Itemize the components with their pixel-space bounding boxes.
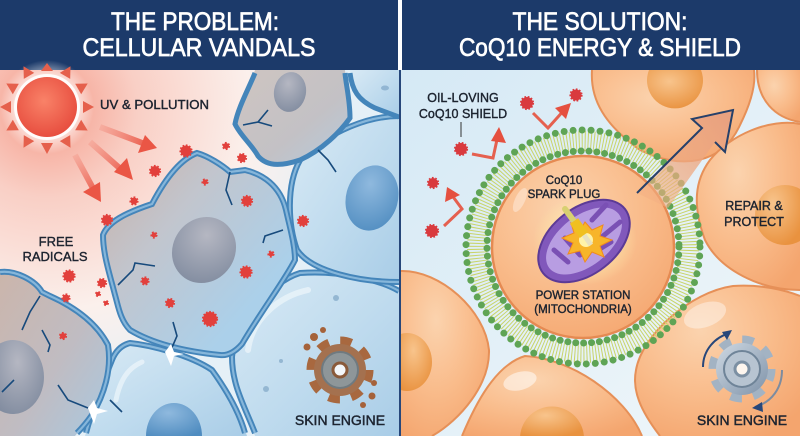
cell: left orange <box>401 271 489 436</box>
label: CoQ10 spark plug: SPARK PLUG <box>528 189 600 201</box>
radicals deflected by shield <box>426 90 582 237</box>
label: power station: POWER STATION <box>536 290 630 302</box>
header: the problem: CELLULAR VANDALS <box>82 34 316 62</box>
sun <box>0 60 94 154</box>
label: skin engine: SKIN ENGINE <box>295 412 385 428</box>
label: oil-loving CoQ10 shield: OIL-LOVING <box>427 91 499 105</box>
big arrow: repair and protect <box>637 110 733 208</box>
cell: bottom orange <box>462 356 642 436</box>
mitochondrion with spark plug <box>537 198 631 284</box>
divider <box>399 70 401 436</box>
cell: top-right orange <box>757 70 800 122</box>
cell: top damaged <box>235 70 350 172</box>
cell: lower-right orange <box>635 286 800 436</box>
label: oil-loving CoQ10 shield: CoQ10 SHIELD <box>419 107 507 121</box>
label: free radicals: RADICALS <box>22 249 88 264</box>
label: repair and protect: PROTECT <box>724 215 784 229</box>
cell: right healthy <box>290 116 406 282</box>
arrows: UV rays <box>75 127 157 202</box>
label: skin engine: SKIN ENGINE <box>697 412 787 428</box>
icon: clean gear <box>703 330 782 412</box>
header: the solution: CoQ10 ENERGY & SHIELD <box>459 34 741 62</box>
label: power station: (MITOCHONDRIA) <box>534 304 632 316</box>
cell: bottom-right healthy <box>232 272 399 436</box>
free radicals <box>60 143 308 339</box>
cell: centre damaged <box>103 153 295 366</box>
panel: the solution <box>401 70 800 436</box>
label: free radicals: FREE <box>39 234 74 249</box>
header: the solution: THE SOLUTION: <box>512 8 688 36</box>
cell: top orange <box>592 70 754 161</box>
label: repair and protect: REPAIR & <box>725 199 783 213</box>
cell: bottom-left damaged <box>0 272 122 436</box>
header: the solution <box>402 0 800 70</box>
panel: the problem <box>0 70 406 436</box>
cell: bottom middle healthy <box>85 343 247 436</box>
central orange cell <box>492 156 674 338</box>
label: CoQ10 spark plug: CoQ10 <box>546 175 582 187</box>
cell: right orange <box>697 123 800 290</box>
cell: top-right healthy <box>350 70 399 117</box>
shield membrane <box>466 130 700 364</box>
label: UV & pollution: UV & POLLUTION <box>100 98 209 112</box>
header: the problem <box>0 0 398 70</box>
label: oil-loving CoQ10 shield <box>419 91 507 137</box>
icon: rusty gear <box>304 327 377 408</box>
header: the problem: THE PROBLEM: <box>111 8 279 36</box>
